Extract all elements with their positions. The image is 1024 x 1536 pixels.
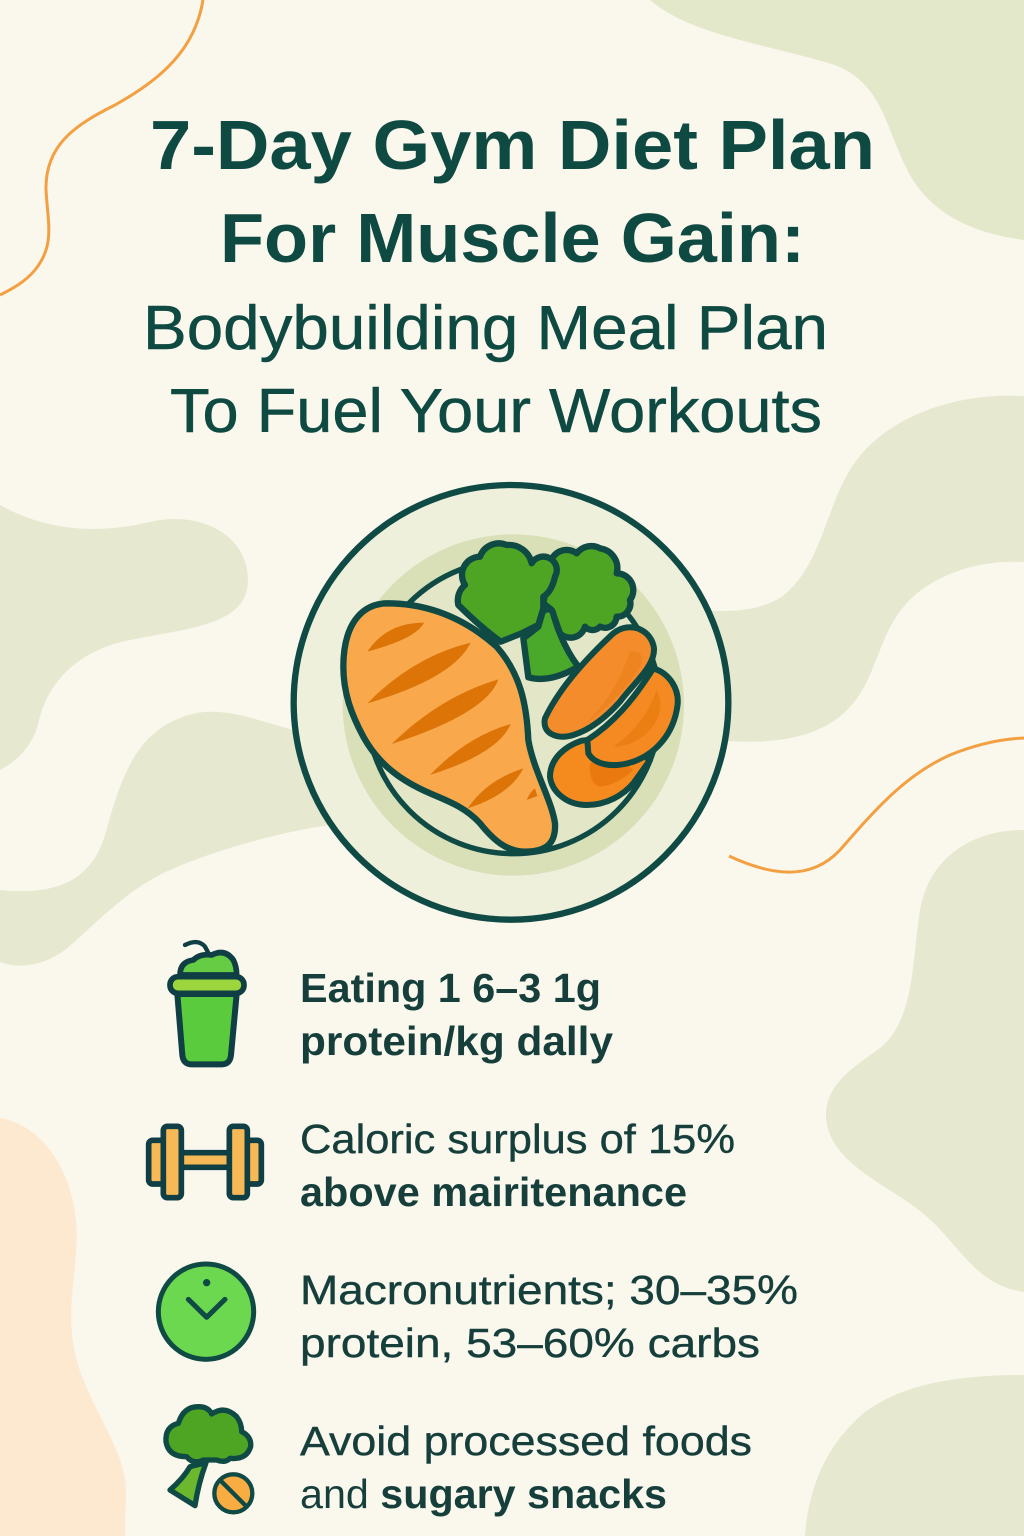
carrot slice top [545, 627, 654, 737]
background blob: top right [650, 0, 1024, 240]
broccoli stem [523, 609, 578, 679]
text: avoid processed foods: Avoid processed foods [300, 1418, 752, 1464]
plate well shadow [343, 534, 684, 876]
subtitle [143, 294, 828, 446]
text: caloric surplus: above mairitenance [300, 1169, 687, 1215]
carrot slice middle [587, 668, 678, 765]
carrot slice bottom [550, 737, 650, 805]
subtitle: Bodybuilding Meal Plan [143, 294, 828, 363]
title [150, 106, 875, 277]
text: macronutrients [300, 1267, 798, 1366]
plate rim [294, 485, 728, 920]
text: avoid processed foods: and sugary snacks [300, 1471, 667, 1517]
text: macronutrients: Macronutrients; 30–35% [300, 1267, 798, 1313]
text: avoid processed foods [300, 1418, 752, 1517]
background blob: bottom right [805, 1375, 1024, 1536]
plate well [366, 560, 660, 854]
orange curve: right [729, 738, 1024, 872]
icon: dumbbell [149, 1126, 261, 1198]
subtitle: To Fuel Your Workouts [170, 377, 822, 446]
title: For Muscle Gain: [220, 199, 805, 277]
background blob: bottom left orange [0, 1118, 126, 1536]
plate illustration [294, 485, 728, 920]
orange curve: top left [0, 0, 203, 295]
text: macronutrients: protein, 53–60% carbs [300, 1320, 760, 1366]
icon: broccoli with no sign [166, 1407, 252, 1512]
text: caloric surplus [300, 1116, 735, 1215]
background blob: left upper [0, 505, 248, 770]
icon: protein shake [170, 942, 244, 1064]
text: protein intake [300, 965, 613, 1064]
icon: clock [158, 1264, 254, 1359]
chicken breast [343, 603, 555, 852]
background blob: right lower [826, 830, 1024, 1292]
broccoli head right [543, 546, 633, 638]
broccoli head left [458, 543, 557, 642]
text: caloric surplus: Caloric surplus of 15% [300, 1116, 735, 1162]
text: protein intake: Eating 1 6–3 1g [300, 965, 601, 1011]
background blob: left lower [0, 712, 400, 966]
title: 7-Day Gym Diet Plan [150, 106, 875, 184]
text: protein intake: protein/kg dally [300, 1018, 613, 1064]
background blob: right middle [700, 396, 1024, 742]
